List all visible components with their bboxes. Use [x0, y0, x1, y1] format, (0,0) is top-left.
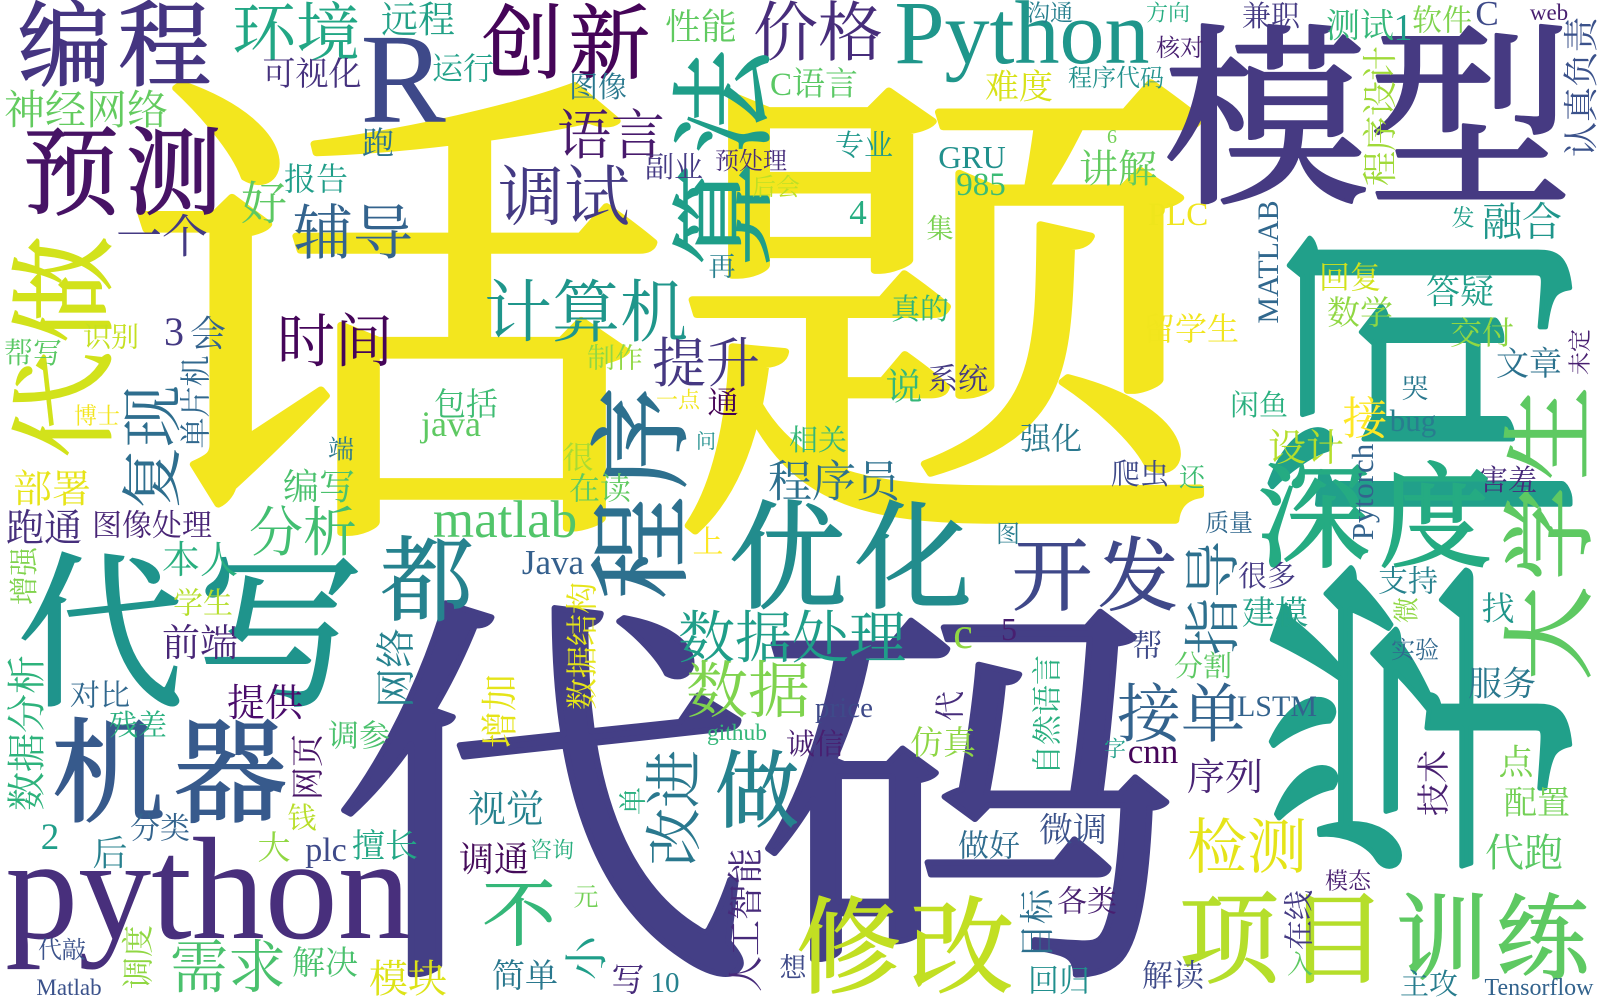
word: 后会: 后会: [752, 174, 800, 201]
word: 数据结构: 数据结构: [564, 582, 600, 710]
word: 深度: 深度: [1257, 458, 1501, 582]
word: 入: 入: [1287, 950, 1313, 980]
word: 跑: 跑: [362, 125, 394, 161]
word: 通: 通: [708, 386, 738, 420]
word: 还: 还: [1179, 464, 1206, 492]
word: 服务: 服务: [1468, 666, 1536, 704]
word: 机器: 机器: [52, 712, 296, 838]
word: 人工智能: 人工智能: [726, 848, 766, 992]
word: 帮写: 帮写: [4, 337, 62, 370]
word: 在读: 在读: [569, 472, 631, 506]
word: c: c: [953, 609, 973, 658]
word: 咨询: 咨询: [530, 838, 574, 862]
word: MATLAB: MATLAB: [1252, 200, 1285, 324]
word: 创新: 创新: [482, 0, 656, 90]
word: 软件: 软件: [1412, 4, 1472, 38]
word: 时间: 时间: [277, 310, 393, 374]
word: 在线: 在线: [1284, 890, 1316, 950]
word: 检测: 检测: [1187, 815, 1307, 881]
word: bug: bug: [1390, 403, 1436, 438]
word: 强化: 强化: [1020, 422, 1082, 456]
word: 调度: 调度: [120, 925, 156, 989]
word: GRU: GRU: [938, 139, 1006, 175]
word: 环境: 环境: [232, 0, 360, 70]
word: R: R: [360, 8, 446, 150]
word: 代写: 代写: [17, 544, 377, 730]
word: 调试: 调试: [498, 162, 630, 234]
word: 程序设计: 程序设计: [1362, 46, 1400, 186]
word: 上: 上: [692, 524, 724, 560]
word: 难度: 难度: [985, 68, 1053, 106]
word: java: java: [419, 404, 481, 444]
word: 测试: 测试: [1326, 8, 1394, 46]
word: 端: 端: [328, 436, 354, 464]
word: 算法: 算法: [668, 42, 784, 266]
word: 解决: 解决: [292, 945, 358, 982]
word: 微调: 微调: [1039, 812, 1107, 850]
word: 1: 1: [1394, 7, 1412, 49]
word: 制作: 制作: [587, 342, 643, 374]
word: 分类: 分类: [130, 812, 190, 846]
word: 运行: 运行: [432, 52, 494, 86]
word: 字: 字: [1104, 736, 1126, 762]
word: 网页: 网页: [291, 734, 327, 800]
word: 各类: 各类: [1057, 886, 1117, 918]
word: 指导: 指导: [1182, 541, 1246, 655]
word: python: python: [5, 808, 411, 970]
word: 视觉: 视觉: [468, 789, 544, 831]
word: 回归: 回归: [1028, 964, 1090, 998]
word: price: price: [815, 692, 873, 724]
word: 博士: 博士: [74, 404, 120, 428]
word: 前端: 前端: [162, 623, 238, 665]
word: 专业: 专业: [835, 129, 893, 162]
word: 好: 好: [241, 178, 287, 230]
word: 害羞: 害羞: [1479, 464, 1537, 497]
word: Matlab: Matlab: [36, 975, 102, 1000]
word: 程序代码: 程序代码: [1068, 65, 1164, 92]
word: 很多: 很多: [1238, 560, 1296, 593]
word: 预处理: 预处理: [715, 148, 787, 175]
word: 模态: 模态: [1325, 868, 1372, 894]
word: 不: 不: [482, 874, 556, 956]
word: 设计: 设计: [1268, 428, 1344, 470]
word: 真的: 真的: [891, 293, 949, 326]
word: 答疑: 答疑: [1426, 274, 1494, 312]
word: 沟通: 沟通: [1027, 0, 1073, 26]
word: 数据分析: 数据分析: [6, 655, 50, 811]
word: 数学: 数学: [1327, 295, 1393, 332]
word: 对比: 对比: [70, 680, 130, 712]
word: 开发: 开发: [1012, 534, 1184, 622]
word: 程序: 程序: [588, 379, 700, 599]
word: 代 (rotated): 代: [934, 691, 968, 721]
word: 技术: 技术: [1416, 750, 1453, 816]
word: PLC: PLC: [1148, 197, 1208, 233]
word: github: github: [707, 720, 767, 746]
word: 图像处理: 图像处理: [92, 510, 212, 542]
word: 985: 985: [956, 167, 1006, 203]
word: 想: 想: [780, 953, 808, 983]
word: 简单: 简单: [492, 958, 558, 995]
word: 辅导: 辅导: [293, 201, 413, 267]
word: 单片机: 单片机: [178, 356, 214, 448]
word: 跑通: 跑通: [6, 508, 82, 550]
word: 会: 会: [190, 314, 226, 354]
word: C语言: C语言: [770, 66, 858, 103]
word: 文章: 文章: [1496, 346, 1562, 383]
word: 提供: 提供: [227, 683, 304, 725]
word: 系统: 系统: [928, 364, 988, 396]
word: web: web: [1530, 0, 1568, 25]
word: 写: 写: [612, 963, 644, 999]
word: matlab: matlab: [433, 491, 577, 549]
word: 核对: 核对: [1156, 35, 1204, 62]
word: 后: 后: [92, 834, 128, 874]
word: 神经网络: 神经网络: [4, 87, 168, 133]
word: 调通: 调通: [459, 840, 529, 880]
word: 程序员: 程序员: [768, 458, 903, 506]
word: 点: 点: [1498, 744, 1534, 782]
word: 集: 集: [926, 214, 954, 244]
word: 融合: 融合: [1482, 200, 1562, 244]
word: 单 (rotated): 单: [618, 787, 650, 815]
word: 价格: 价格: [753, 0, 883, 70]
word: 小 (rotated): 小: [562, 935, 612, 980]
word: 模型: 模型: [1163, 15, 1573, 231]
word: 元: 元: [573, 884, 599, 912]
word: 编写: 编写: [283, 467, 355, 507]
word: 留学生: 留学生: [1143, 311, 1239, 347]
word: 网络: 网络: [374, 628, 418, 708]
word: 做: 做: [715, 746, 799, 840]
word: 计算机: 计算机: [484, 275, 688, 351]
word: 分割: 分割: [1174, 650, 1232, 683]
word: 复现: 复现: [120, 385, 188, 509]
word: cnn: cnn: [1128, 732, 1178, 771]
word: plc: plc: [305, 832, 347, 869]
word: 残差: 残差: [109, 709, 167, 742]
word: 提升: 提升: [652, 334, 760, 394]
word: 微 (rotated): 微: [1392, 597, 1422, 623]
word: 分析: 分析: [249, 503, 357, 563]
word: 代跑: 代跑: [1485, 832, 1563, 876]
word: 自然语言: 自然语言: [1032, 655, 1064, 775]
word: 实验: 实验: [1391, 637, 1439, 664]
word: 优化: 优化: [729, 496, 981, 624]
word: 支持: 支持: [1378, 566, 1438, 598]
word: 2: 2: [41, 817, 59, 858]
word: 说: 说: [886, 368, 922, 408]
word: 远程: 远程: [381, 0, 455, 42]
word: 目标: 目标: [1018, 888, 1058, 959]
word: 数据处理: 数据处理: [678, 608, 906, 670]
word: 帮: 帮: [1132, 628, 1162, 664]
word: 项目: 项目: [1179, 886, 1395, 996]
word: 钱: 钱: [287, 802, 317, 835]
word: 6: 6: [1107, 126, 1117, 148]
word: 训练: 训练: [1396, 890, 1596, 992]
word: 预测: 预测: [23, 120, 229, 228]
word: 3: 3: [164, 309, 184, 354]
word: 副业: 副业: [645, 151, 703, 184]
word: 一点: 一点: [656, 388, 701, 412]
word: 识别: 识别: [83, 322, 139, 354]
word: 部署: 部署: [13, 468, 91, 512]
word: LSTM: LSTM: [1237, 690, 1317, 723]
word: 做好: 做好: [958, 828, 1020, 864]
word: 可视化: 可视化: [262, 56, 362, 93]
word: 学生: 学生: [173, 588, 233, 620]
word: 问: 问: [696, 430, 716, 453]
word: 方向: 方向: [1146, 0, 1190, 26]
word: 性能: 性能: [665, 7, 737, 47]
word: 一个: 一个: [116, 212, 208, 262]
word: 需求: 需求: [170, 936, 286, 1000]
word: 找: 找: [1482, 591, 1514, 628]
word: 都: 都: [380, 532, 474, 634]
word: 接: 接: [1342, 394, 1388, 444]
word: 接单: 接单: [1117, 680, 1245, 750]
word: 语言: 语言: [557, 106, 665, 166]
word: 交付: 交付: [1450, 315, 1514, 351]
word: 再: 再: [708, 252, 736, 282]
word: 图: 图: [996, 521, 1020, 548]
word: 4: 4: [849, 193, 867, 232]
word: 兼职: 兼职: [1242, 0, 1301, 33]
word: 大: 大: [258, 830, 290, 867]
word: Java: Java: [522, 543, 585, 582]
word: 本人: 本人: [162, 540, 238, 582]
word: 发: 发: [1452, 206, 1474, 230]
word: 配置: 配置: [1504, 786, 1570, 822]
word: 诚信: 诚信: [786, 728, 844, 761]
word: 讲解: 讲解: [1079, 148, 1157, 192]
word: 未定: 未定: [1568, 329, 1592, 375]
word: 代敲: 代敲: [38, 937, 86, 964]
word: 解读: 解读: [1142, 958, 1204, 994]
word: 话题: 话题: [121, 56, 1219, 600]
word: 闲鱼: 闲鱼: [1230, 389, 1288, 422]
word: Pytorch: Pytorch: [1345, 443, 1380, 540]
word: 增加: 增加: [480, 674, 522, 748]
word: 调参: 调参: [328, 718, 390, 754]
word: 哭: 哭: [1402, 374, 1428, 404]
word: 5: 5: [1001, 611, 1017, 647]
word: 增强: 增强: [8, 546, 41, 605]
word: 改进: 改进: [642, 750, 708, 866]
word: 图像: 图像: [569, 71, 627, 104]
word: 序列: 序列: [1187, 757, 1263, 799]
word: 相关: 相关: [789, 424, 847, 457]
word: 代做: 代做: [8, 228, 126, 458]
word: 仿真: 仿真: [910, 725, 977, 762]
word: 很: 很: [562, 440, 594, 476]
word: 报告: 报告: [284, 161, 348, 197]
word: 建模: 建模: [1242, 595, 1308, 632]
word: 数据: 数据: [686, 658, 810, 726]
word: 爬虫: 爬虫: [1111, 458, 1169, 491]
word: 质量: 质量: [1205, 510, 1253, 537]
word: 10: 10: [650, 967, 680, 999]
word: 回复: 回复: [1319, 260, 1381, 296]
word: 包括: 包括: [434, 386, 498, 422]
word: 擅长: 擅长: [352, 828, 418, 865]
